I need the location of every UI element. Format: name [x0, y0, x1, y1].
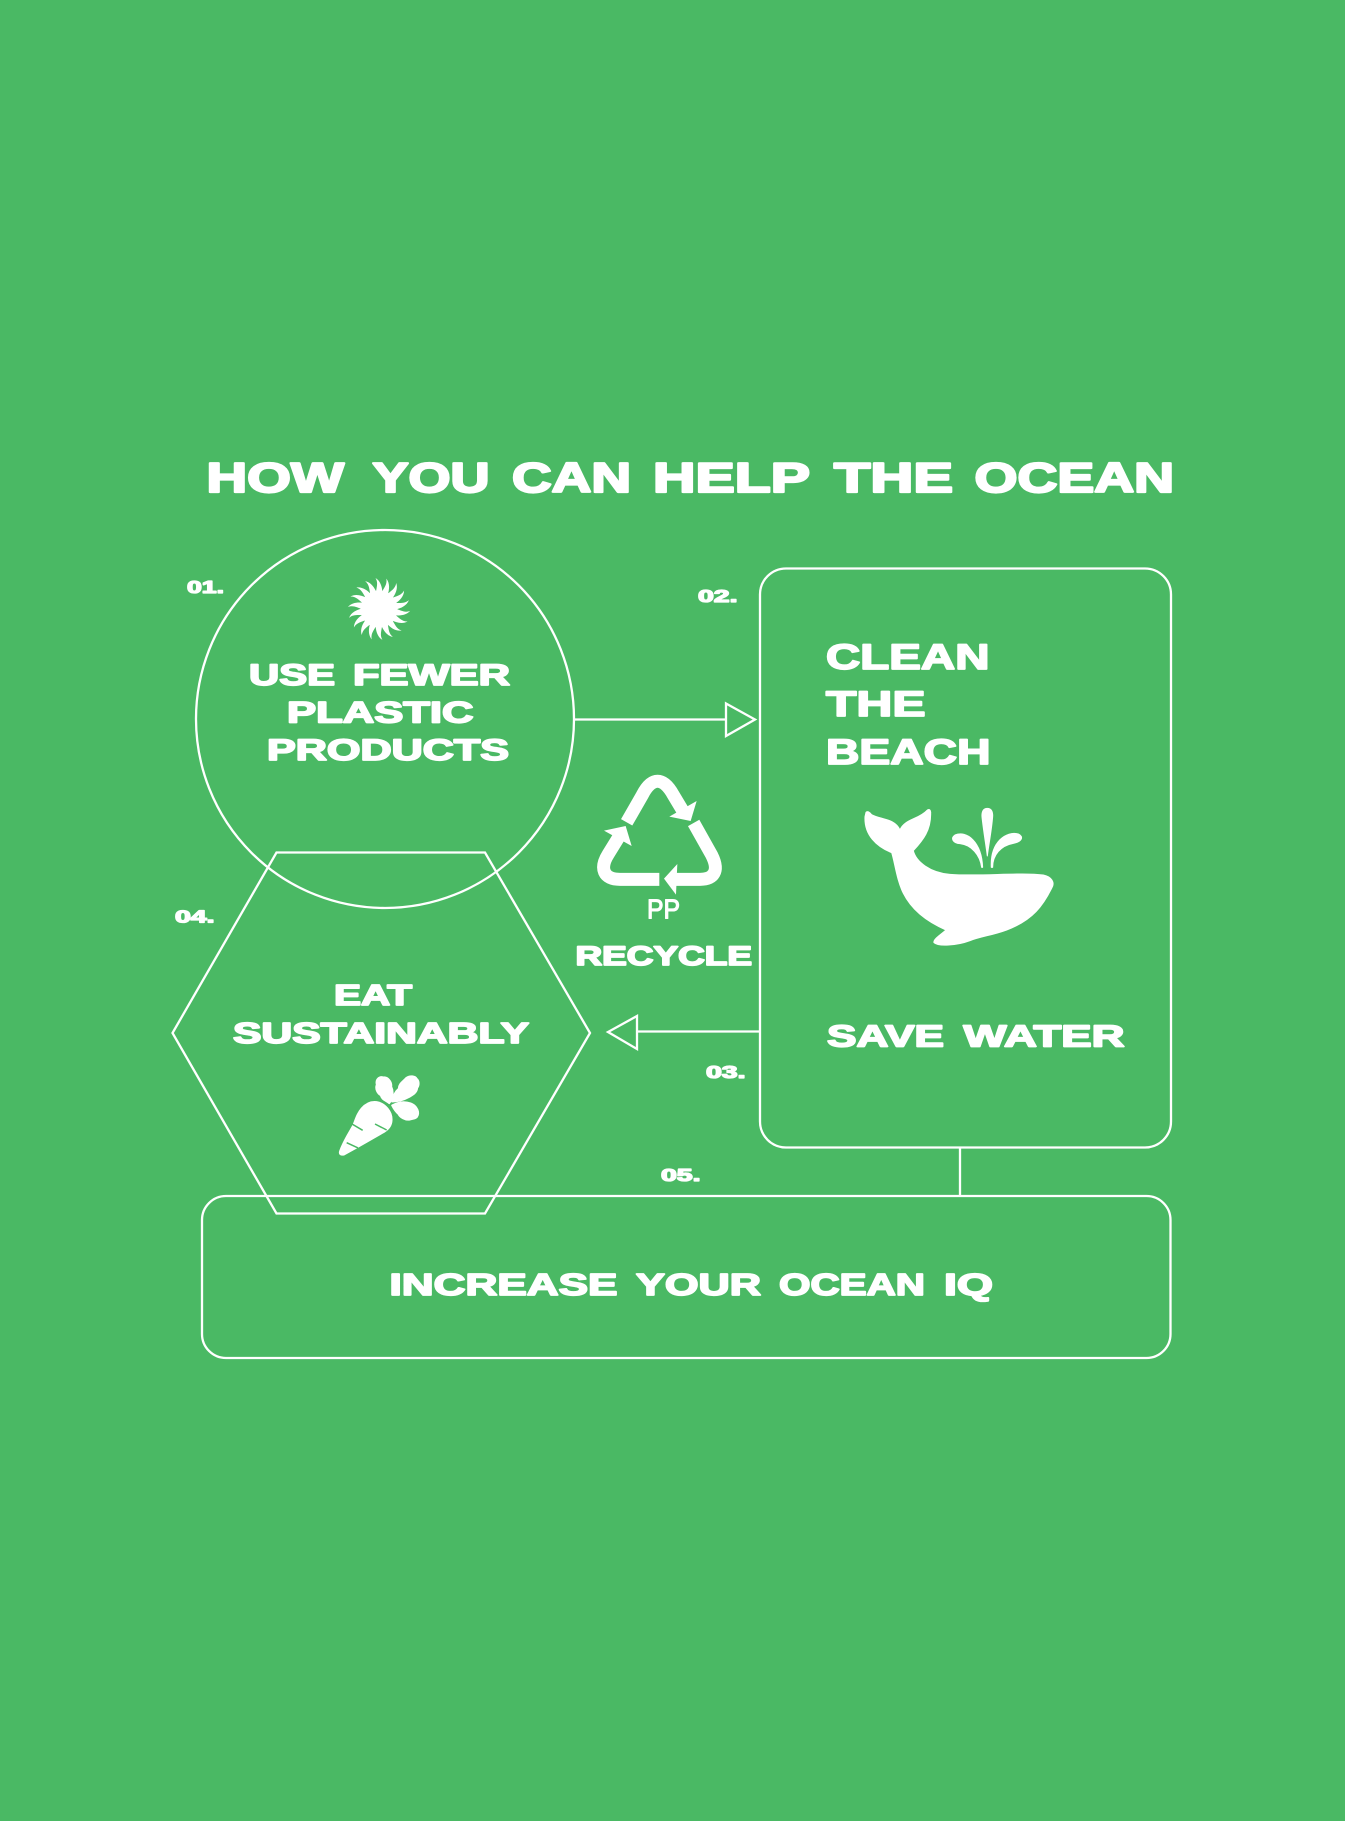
text: increase your ocean iq [390, 1267, 993, 1302]
text: use fewer plastic products: USE [249, 659, 335, 692]
text: use fewer plastic products: PLASTIC [287, 696, 474, 730]
number 02: 02. [698, 586, 738, 606]
text: recycle: RECYCLE [576, 941, 752, 971]
title: HELP [653, 454, 810, 501]
hexagon outline [172, 852, 590, 1214]
title: THE [834, 454, 953, 501]
title: OCEAN [974, 454, 1174, 501]
text: save water [827, 1018, 1124, 1054]
arrow: save water to eat sustainably [608, 1016, 760, 1049]
panel: 01 use fewer plastic products [187, 530, 574, 908]
title: YOU [372, 454, 490, 501]
text: increase your ocean iq: YOUR [636, 1267, 761, 1302]
number 05: 05. [661, 1165, 700, 1185]
text: clean the beach: BEACH [826, 732, 990, 772]
number 04: 04. [175, 906, 214, 926]
panel: 02 clean the beach and 03 save water [698, 568, 1171, 1148]
text: eat sustainably [233, 980, 529, 1050]
arrow: circle to clean the beach [574, 704, 755, 736]
rounded panel outline [760, 568, 1171, 1148]
title [206, 454, 1174, 501]
text: eat sustainably: SUSTAINABLY [233, 1018, 529, 1050]
text: increase your ocean iq: OCEAN [779, 1267, 925, 1302]
icon and label: recycle [576, 781, 752, 971]
text: save water: WATER [964, 1018, 1124, 1054]
text: clean the beach [826, 637, 990, 772]
circle outline [196, 530, 574, 908]
text: eat sustainably: EAT [334, 980, 412, 1012]
number 01: 01. [187, 577, 224, 597]
text: clean the beach: CLEAN [826, 637, 990, 677]
rounded panel outline [202, 1196, 1170, 1358]
icon: sun [348, 578, 410, 640]
title: HOW [206, 454, 344, 501]
number 03: 03. [706, 1062, 746, 1082]
panel: 04 eat sustainably [172, 852, 590, 1214]
title: CAN [512, 454, 631, 501]
text: save water: SAVE [827, 1018, 944, 1054]
icon: carrot [340, 1076, 419, 1155]
text: use fewer plastic products: FEWER [353, 659, 510, 692]
text: PP: PP [647, 894, 680, 924]
panel: 05 increase your ocean iq [202, 1196, 1170, 1358]
text: use fewer plastic products: PRODUCTS [267, 734, 509, 767]
icon: whale with spout [865, 808, 1053, 945]
connector: save water to ocean iq [959, 1147, 961, 1196]
text: increase your ocean iq: IQ [944, 1267, 993, 1302]
text: increase your ocean iq: INCREASE [390, 1267, 618, 1302]
icon: recycling triangle [604, 781, 715, 895]
text: clean the beach: THE [826, 684, 926, 724]
text: use fewer plastic products [249, 659, 510, 767]
